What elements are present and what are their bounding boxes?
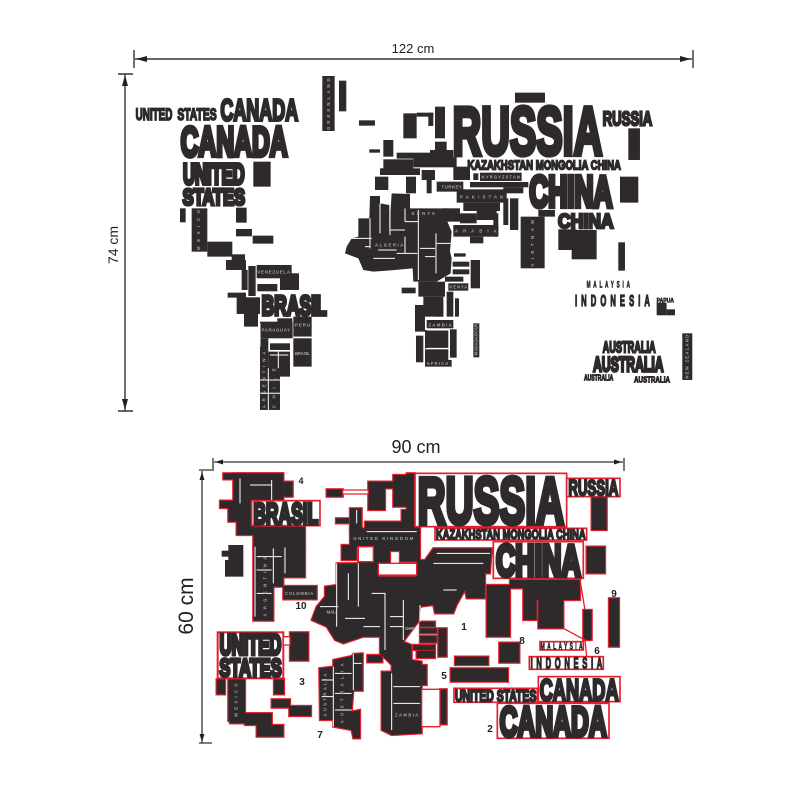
- part numbers: 7: [317, 730, 323, 741]
- small country labels: sheet left: MEXICO: [233, 683, 238, 717]
- word: CHINA small: CHINA: [558, 210, 614, 233]
- word: UNITED STATES sheet: [218, 630, 283, 683]
- dimension: 74 cm height: [105, 74, 133, 411]
- small country labels: TURKEY: [442, 185, 462, 190]
- dimension: 90 cm width: [213, 437, 624, 471]
- small country labels: sheet left: ARGENTINA: [263, 556, 268, 617]
- top word map: Eurasia and Oceania: [369, 93, 692, 385]
- small country labels: Africa: MADAGASCAR: [474, 323, 479, 355]
- words: AUSTRALIA: AUSTRALIA: [603, 339, 656, 356]
- word: UNITED STATES sheet: UNITED: [220, 630, 281, 662]
- small country labels: ARABIA: [455, 228, 498, 233]
- small country labels: Americas: PARAGUAY: [262, 328, 290, 333]
- top word map: Americas: [136, 76, 375, 410]
- texture slits: South America: [240, 478, 417, 617]
- part numbers: 9: [611, 589, 617, 600]
- words: North America: STATES: [183, 184, 245, 210]
- small country labels: sheet left: [233, 536, 414, 717]
- small country labels: sheet Africa: AUSTRALIA: [323, 672, 328, 717]
- dimension: 122 cm width: 122 cm: [392, 41, 434, 56]
- word: RUSSIA large: RUSSIA: [453, 95, 602, 170]
- part numbers: 4: [298, 476, 304, 486]
- small country labels: [442, 174, 535, 267]
- words: North America: UNITED: [183, 159, 245, 191]
- word: UNITED STATES sheet: STATES: [219, 655, 282, 683]
- small country labels: sheet left: COLOMBIA: [285, 591, 314, 596]
- part numbers: 10: [295, 601, 307, 612]
- word: New Zealand vertical: NEW ZEALAND: [685, 335, 690, 379]
- word: RUSSIA sheet: RUSSIA: [418, 464, 564, 537]
- words: North America: CANADA: [220, 93, 298, 127]
- cut sheet: right half pieces: [407, 464, 620, 745]
- words: Kazakhstan sheet: KAZAKHSTAN MONGOLIA CHINA: [436, 526, 586, 542]
- cut sheet: left half pieces: [217, 473, 420, 737]
- small country labels: Americas: PERU: [295, 323, 310, 328]
- part numbers: 5: [441, 671, 447, 682]
- small country labels: Americas: ARGENTINA: [261, 351, 266, 408]
- small country labels: Africa: ZAMBIA: [428, 323, 453, 328]
- dimension: 90 cm width: 90 cm: [391, 437, 441, 457]
- small country labels: Americas: [196, 78, 331, 408]
- word: CHINA sheet: CHINA: [496, 538, 581, 586]
- small country labels: Africa: ALGERIA: [375, 243, 404, 248]
- words: Kazakhstan Mongolia China: KAZAKHSTAN MONGOLIA CHINA: [467, 158, 621, 173]
- connector lines: [563, 580, 587, 657]
- words: UNITED STATES sheet: UNITED STATES: [455, 686, 536, 705]
- small country labels: sheet Africa: CHAD: [405, 626, 415, 631]
- word: China second sheet: CHINA: [525, 578, 579, 605]
- word: BRASIL sheet: [252, 498, 320, 531]
- small country labels: Americas: BRASIL: [295, 351, 310, 356]
- open frames: [358, 547, 440, 727]
- cut sheet: Africa and Middle East pieces: [312, 547, 492, 738]
- dimension: 74 cm height: 74 cm: [105, 226, 121, 264]
- word: PAPUA: [657, 297, 675, 315]
- part numbers: 8: [519, 636, 525, 647]
- part numbers: 2: [487, 724, 493, 735]
- small country labels: Americas: CHILE: [271, 368, 276, 408]
- word: INDONESIA: INDONESIA: [575, 292, 650, 310]
- part numbers: [295, 476, 617, 741]
- small country labels: sheet Africa: [323, 609, 419, 723]
- words: AUSTRALIA: AUSTRALIA: [634, 375, 671, 385]
- top word map: Africa: [345, 193, 480, 367]
- small country labels: Africa: KENYA: [449, 285, 468, 290]
- red frame around large words: [415, 473, 620, 738]
- part numbers: 6: [594, 646, 600, 657]
- dimension: 60 cm height: 60 cm: [175, 577, 198, 635]
- word: PAPUA: PAPUA: [657, 297, 674, 304]
- cut sheet: red outlines: [217, 473, 619, 738]
- texture slits: Americas: [260, 323, 312, 410]
- small country labels: KYRGYZSTAN: [482, 174, 520, 179]
- word: New Zealand vertical: [682, 333, 692, 380]
- words: North America: STATES: [177, 106, 217, 124]
- words: North America: CANADA: [181, 119, 288, 165]
- word: RUSSIA small sheet: RUSSIA: [568, 475, 618, 500]
- part numbers: 3: [299, 677, 305, 688]
- link frames: [283, 490, 368, 645]
- small country labels: Americas: MEXICO: [196, 209, 201, 250]
- word: INDONESIA sheet: INDONESIA: [531, 654, 602, 672]
- texture slits: [320, 553, 490, 730]
- words: AUSTRALIA: AUSTRALIA: [593, 353, 664, 376]
- words: AUSTRALIA: AUSTRALIA: [584, 374, 613, 383]
- word: BRASIL: BRASIL: [262, 290, 327, 321]
- small country labels: sheet Africa: ZAMBIA: [395, 713, 419, 718]
- word: CANADA large sheet: CANADA: [500, 698, 607, 745]
- word: MALAYSIA sheet: MALAYSIA: [541, 640, 583, 652]
- small country labels: Africa: AFRICA: [427, 361, 449, 366]
- word: CANADA small sheet: CANADA: [540, 673, 619, 707]
- words: North America: [136, 93, 298, 210]
- word: CHINA large: CHINA: [529, 169, 612, 217]
- word: BRASIL sheet: BRASIL: [253, 498, 318, 531]
- Europe blocks: [369, 107, 478, 193]
- small country labels: sheet left: UNITED KINGDOM: [353, 536, 414, 541]
- texture slits: Africa: [352, 203, 451, 348]
- small country labels: Africa: KENYA: [412, 211, 436, 216]
- small country labels: Americas: GREENLAND: [326, 78, 331, 130]
- Asia blocks: [443, 93, 640, 271]
- word: RUSSIA small: RUSSIA: [603, 107, 652, 130]
- small country labels: Africa: [375, 211, 479, 366]
- Central America silhouette: [222, 545, 243, 577]
- words: North America: UNITED: [136, 106, 172, 124]
- part numbers: 1: [461, 622, 467, 633]
- words: AUSTRALIA: [584, 339, 671, 385]
- small country labels: Americas: VENEZUELA: [257, 269, 291, 274]
- dimension: 122 cm width: [134, 41, 693, 68]
- word: MALAYSIA: MALAYSIA: [587, 278, 630, 290]
- small country labels: PAKISTAN: [460, 194, 503, 199]
- small country labels: VIETNAM: [530, 220, 535, 267]
- small country labels: sheet Africa: AUSTRALIA: [339, 662, 344, 723]
- small country labels: sheet Africa: MALI: [327, 609, 337, 614]
- dimension: 60 cm height: [175, 470, 212, 743]
